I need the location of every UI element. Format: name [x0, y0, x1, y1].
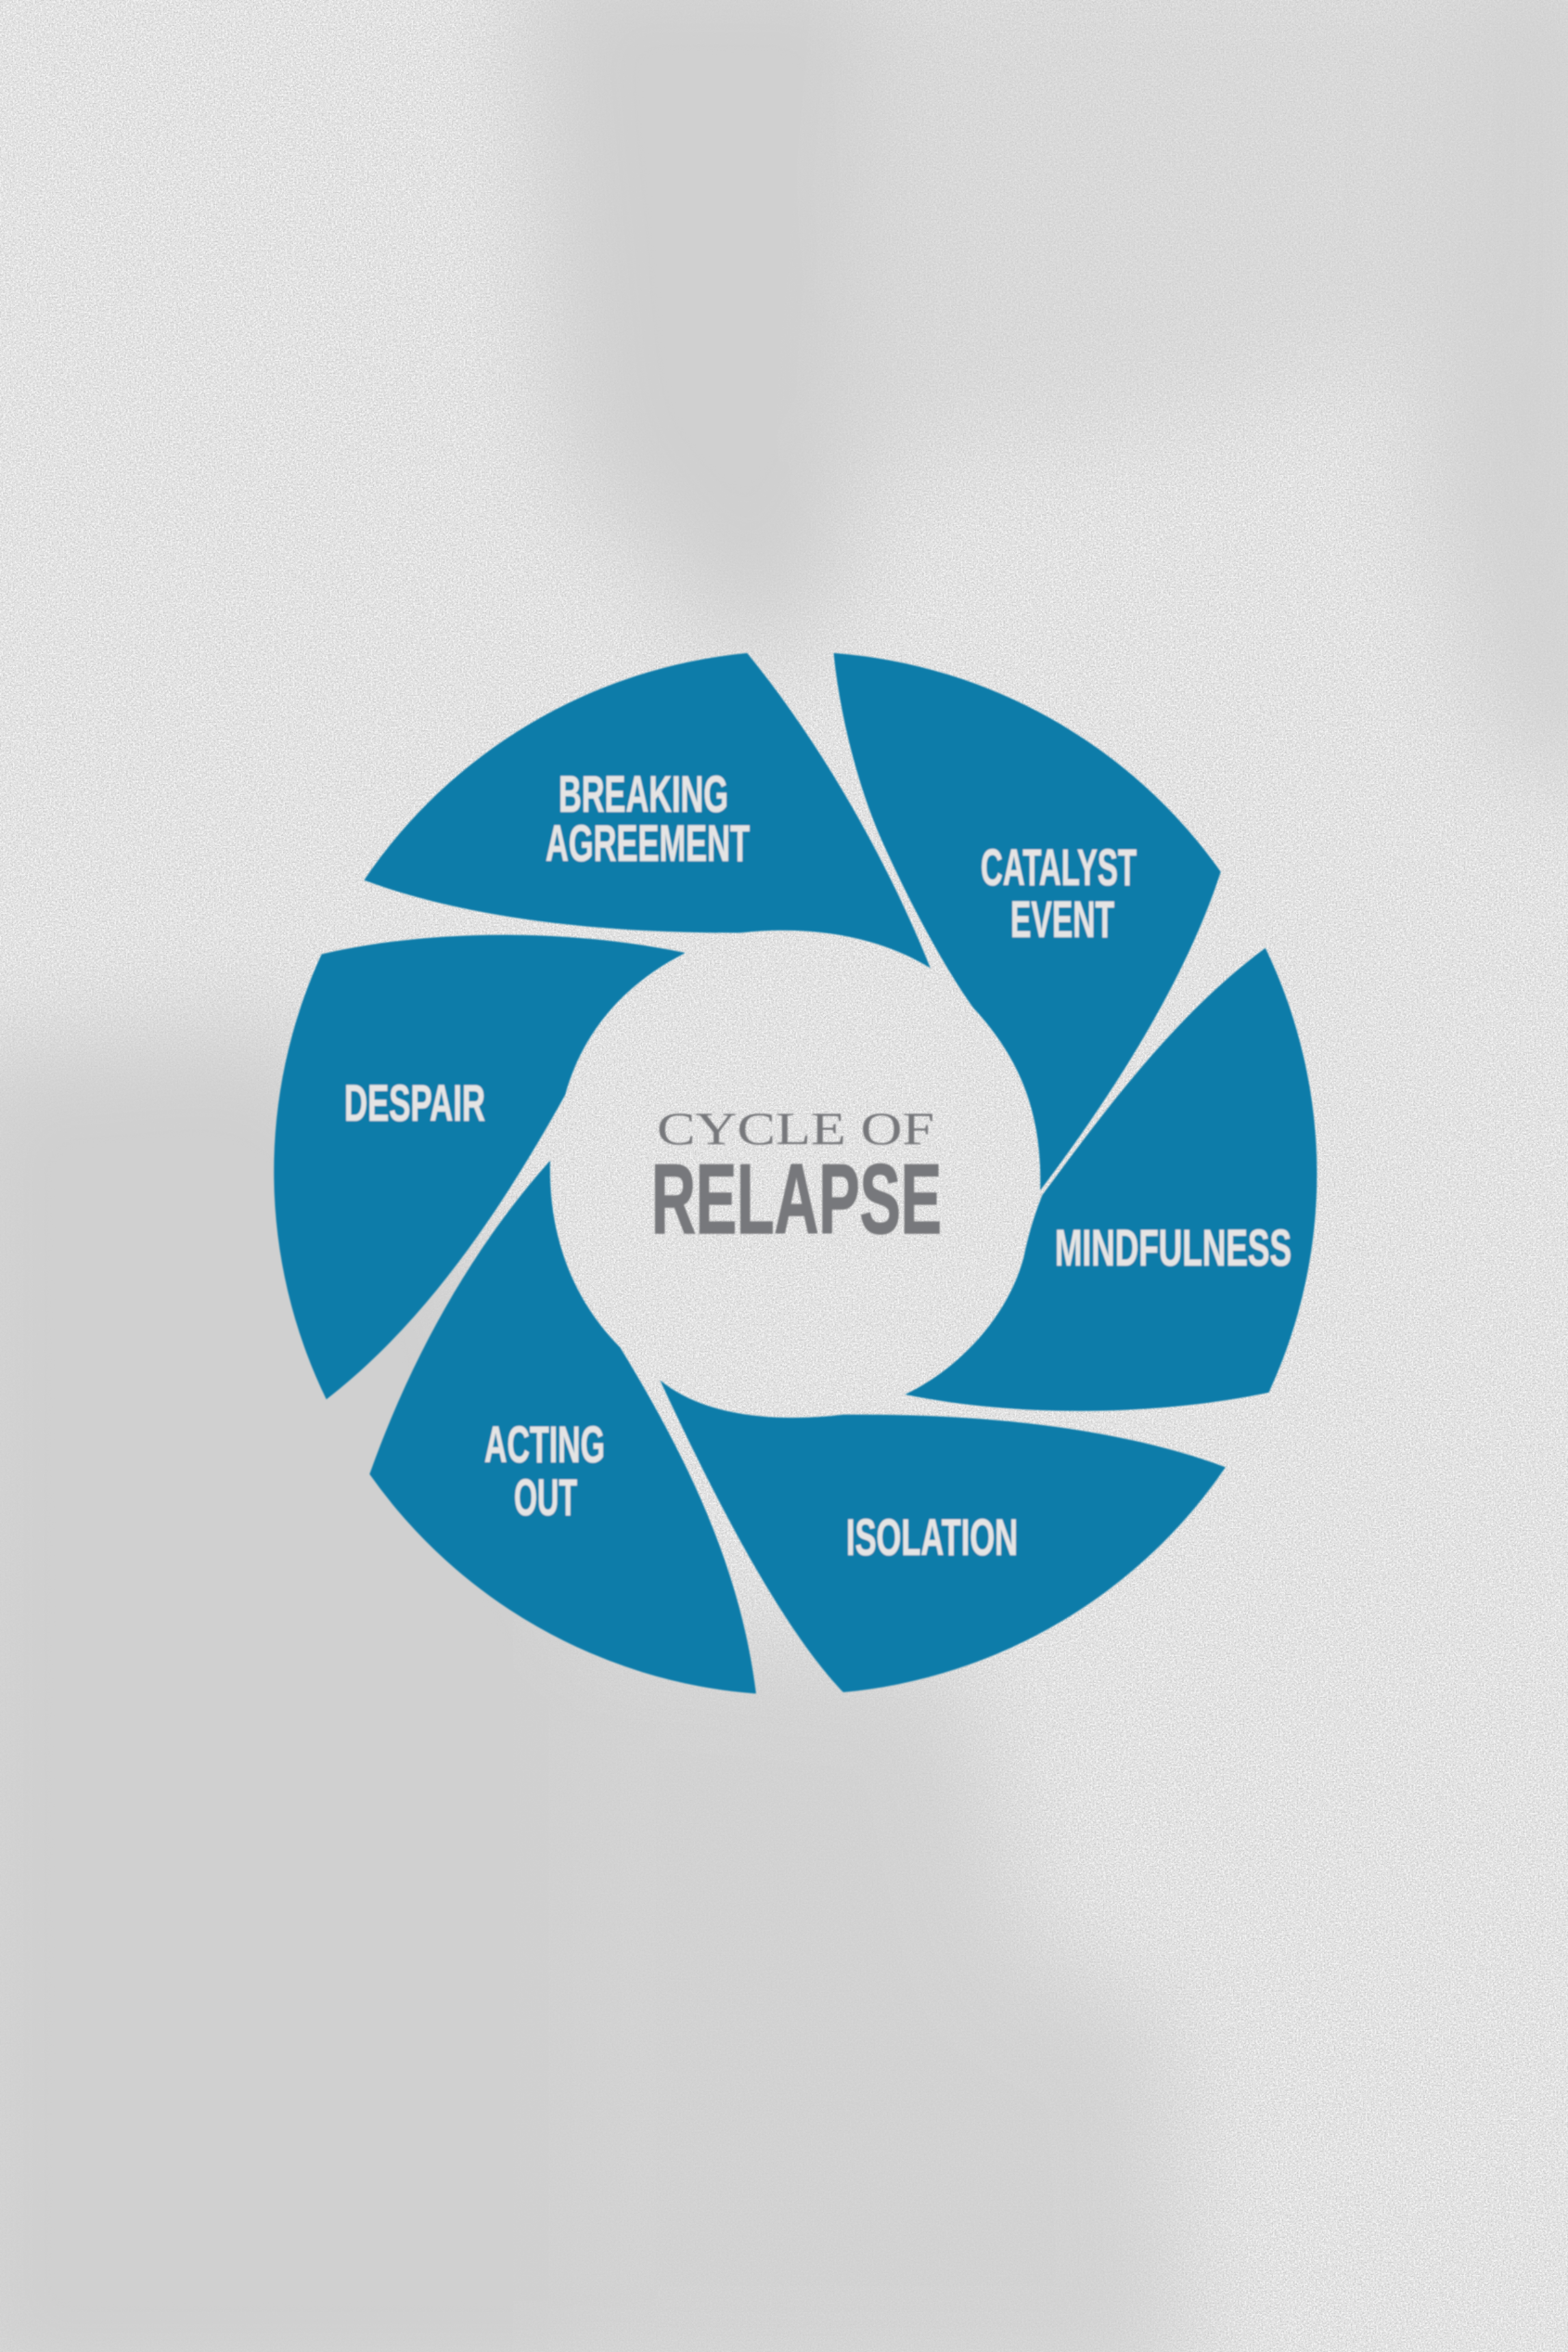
label: breaking agreement: BREAKING — [559, 765, 728, 823]
label: despair: DESPAIR — [344, 1073, 485, 1132]
label: catalyst event: CATALYST — [981, 838, 1137, 896]
title: cycle of relapse — [651, 1102, 942, 1254]
blade: mindfulness — [905, 948, 1317, 1411]
blade: breaking agreement — [364, 653, 931, 968]
blade: catalyst event — [833, 653, 1221, 1190]
label: isolation: ISOLATION — [846, 1508, 1018, 1566]
label: acting out: ACTING — [484, 1415, 605, 1473]
blade: isolation — [660, 1380, 1226, 1692]
label: breaking agreement: AGREEMENT — [546, 814, 750, 872]
label: catalyst event: EVENT — [1010, 890, 1114, 948]
label: mindfulness: MINDFULNESS — [1055, 1218, 1292, 1277]
cycle wheel — [274, 653, 1317, 1693]
label: catalyst event — [981, 838, 1137, 948]
title: cycle of relapse: RELAPSE — [651, 1143, 942, 1254]
label: acting out — [484, 1415, 605, 1526]
blade: despair — [274, 935, 686, 1399]
label: breaking agreement — [546, 765, 750, 872]
title: cycle of relapse: CYCLE OF — [657, 1102, 934, 1154]
label: acting out: OUT — [514, 1468, 577, 1526]
blade: acting out — [369, 1161, 756, 1693]
